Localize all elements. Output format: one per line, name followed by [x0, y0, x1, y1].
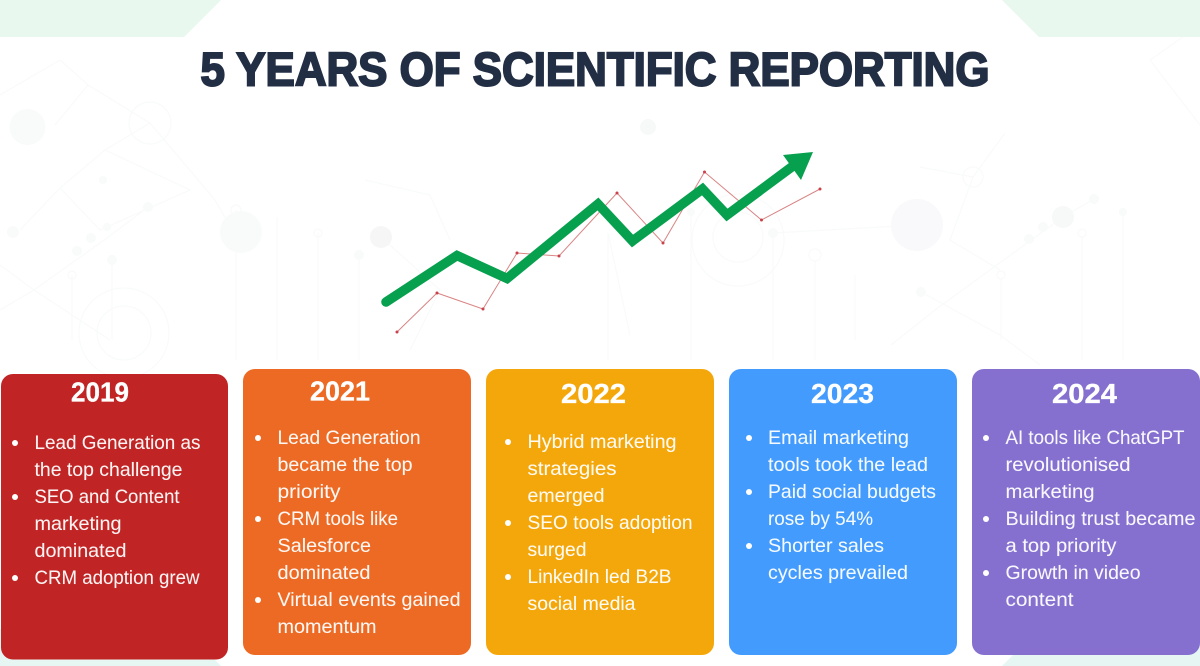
top-right corner banner: [1002, 0, 1200, 37]
bullet list 2024: marketing: [1006, 481, 1094, 503]
bullet list 2021: Lead Generation: [278, 427, 420, 449]
bullet list 2019: [12, 432, 201, 589]
bullet list 2021: [255, 427, 460, 638]
bullet list 2022: strategies: [528, 458, 617, 480]
bottom-left corner banner: [0, 629, 221, 666]
bullet list 2021: dominated: [278, 562, 370, 584]
bottom-right corner banner: [1002, 629, 1200, 666]
panel: 2019: [1, 374, 228, 660]
bullet list 2019: CRM adoption grew: [34, 567, 200, 589]
bullet list 2024: Building trust became: [1006, 508, 1196, 530]
bullet list 2024: revolutionised: [1006, 454, 1130, 476]
bullet list 2021: momentum: [278, 616, 376, 638]
bullet list 2024: content: [1006, 589, 1074, 611]
bullet list 2023: Email marketing: [768, 427, 909, 449]
red thin data line: [396, 170, 822, 334]
panel: 2022: [486, 369, 714, 655]
bullet list 2021: CRM tools like: [278, 508, 398, 530]
panel: 2024: [972, 369, 1200, 655]
bullet list 2019: SEO and Content: [34, 486, 180, 508]
bullet list 2019: the top challenge: [34, 459, 182, 481]
bullet list 2019: marketing: [34, 513, 122, 535]
bullet list 2023: cycles prevailed: [768, 562, 908, 584]
bullet list 2024: a top priority: [1006, 535, 1117, 557]
year 2019: 2019: [71, 376, 129, 408]
bullet list 2024: [983, 427, 1196, 611]
bullet list 2022: emerged: [528, 485, 604, 507]
bullet list 2019: Lead Generation as: [34, 432, 201, 454]
top-left corner banner: [0, 0, 221, 37]
year 2024: 2024: [1052, 378, 1118, 409]
year 2023: 2023: [811, 378, 874, 409]
chart: rising trend lines: [386, 152, 822, 334]
bullet list 2023: tools took the lead: [768, 454, 928, 476]
year 2022: 2022: [561, 378, 626, 409]
bullet list 2021: priority: [278, 481, 341, 503]
bullet list 2023: Shorter sales: [768, 535, 884, 557]
bullet list 2022: [505, 431, 692, 615]
panel: 2023: [729, 369, 957, 655]
bullet list 2024: Growth in video: [1006, 562, 1141, 584]
bullet list 2022: Hybrid marketing: [528, 431, 676, 453]
bullet list 2023: [746, 427, 936, 584]
bullet list 2021: became the top: [278, 454, 413, 476]
bullet list 2022: LinkedIn led B2B: [528, 566, 672, 588]
title: 5 YEARS OF SCIENTIFIC REPORTING: [200, 42, 990, 96]
year 2021: 2021: [310, 376, 370, 406]
bullet list 2023: Paid social budgets: [768, 481, 936, 503]
green growth arrow: [386, 152, 813, 302]
panel: 2021: [243, 369, 471, 655]
bullet list 2021: Salesforce: [278, 535, 371, 557]
bullet list 2022: surged: [528, 539, 586, 561]
bullet list 2024: AI tools like ChatGPT: [1006, 427, 1185, 449]
bullet list 2021: Virtual events gained: [278, 589, 460, 611]
bullet list 2019: dominated: [34, 540, 126, 562]
bullet list 2023: rose by 54%: [768, 508, 873, 530]
bullet list 2022: SEO tools adoption: [528, 512, 692, 534]
bullet list 2022: social media: [528, 593, 636, 615]
